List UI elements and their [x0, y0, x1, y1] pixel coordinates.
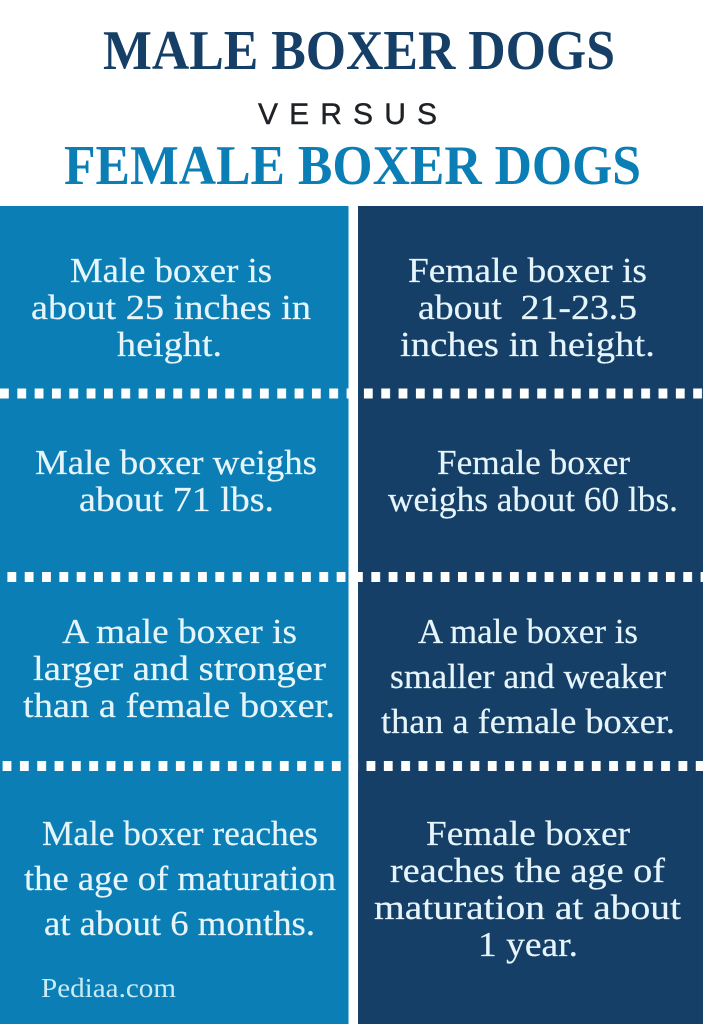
female height: Female boxer is — [408, 252, 647, 290]
panel: male column — [0, 206, 348, 1024]
male size — [23, 613, 335, 725]
female maturation — [374, 815, 681, 964]
male weight: Male boxer weighs — [35, 444, 317, 482]
female weight — [388, 444, 678, 519]
male maturation: at about 6 months. — [44, 905, 315, 943]
male weight: about 71 lbs. — [79, 481, 274, 519]
male maturation: Male boxer reaches — [42, 815, 318, 853]
female maturation: maturation at about — [374, 889, 681, 927]
male size: A male boxer is — [62, 613, 297, 651]
versus label: VERSUS — [258, 98, 437, 131]
female height: inches in height. — [400, 326, 655, 364]
male height: Male boxer is — [70, 252, 272, 290]
female size — [381, 613, 675, 741]
female maturation: Female boxer — [426, 815, 631, 853]
male weight — [35, 444, 317, 519]
male size: than a female boxer. — [23, 687, 335, 725]
female height — [400, 252, 655, 364]
title: male boxer dogs: MALE BOXER DOGS — [103, 20, 615, 82]
female size: A male boxer is — [418, 613, 638, 651]
female size: than a female boxer. — [381, 703, 675, 741]
female height: about 21-23.5 — [418, 289, 637, 327]
male maturation — [24, 815, 336, 943]
female size: smaller and weaker — [390, 658, 667, 696]
male size: larger and stronger — [33, 650, 327, 688]
male height: about 25 inches in — [31, 289, 311, 327]
logo: Pediaa.com: Pediaa.com — [41, 973, 176, 1003]
title: female boxer dogs: FEMALE BOXER DOGS — [64, 135, 641, 197]
female weight: Female boxer — [437, 444, 631, 482]
male maturation: the age of maturation — [24, 860, 336, 898]
female maturation: 1 year. — [478, 926, 578, 964]
panel: female column — [358, 206, 703, 1024]
female weight: weighs about 60 lbs. — [388, 481, 678, 519]
female maturation: reaches the age of — [390, 852, 666, 890]
male height: height. — [117, 326, 222, 364]
male height — [31, 252, 311, 364]
